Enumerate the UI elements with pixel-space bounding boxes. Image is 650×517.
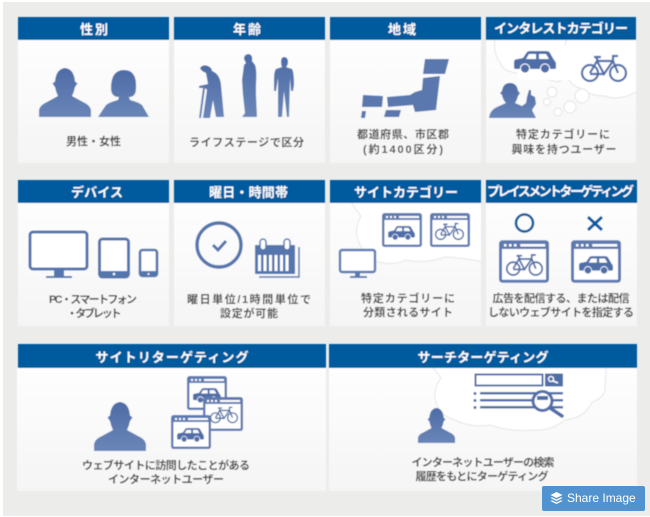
text: インターネットユーザー: インターネットユーザー (108, 473, 224, 486)
icon: person thinking (489, 83, 536, 118)
header: サーチターゲティング (329, 344, 637, 368)
header: 地域: 地域 (388, 22, 416, 37)
header: 年齢: 年齢 (233, 22, 261, 37)
text: 約1400区分: (約1400区分) (363, 142, 443, 156)
icon: monitor (340, 250, 375, 278)
panel: インタレストカテゴリー (486, 17, 640, 163)
share image button: Share Image (567, 491, 636, 505)
header: デバイス (18, 180, 169, 203)
header: インタレストカテゴリー (486, 17, 636, 40)
text: しないウェブサイトを指定する: しないウェブサイトを指定する (488, 305, 634, 319)
icon: smartphone (140, 250, 157, 277)
icon: calendar (255, 239, 299, 277)
text: インターネットユーザーの検索: インターネットユーザーの検索 (412, 455, 554, 469)
panel: サイトリターゲティング (17, 344, 326, 491)
panel: 地域 (330, 17, 481, 163)
text: ウェブサイトに訪問したことがある: ウェブサイトに訪問したことがある (82, 458, 250, 472)
icon: tablet (99, 239, 129, 278)
header: プレイスメントターゲティング (486, 180, 637, 203)
header: デバイス: デバイス (71, 185, 123, 200)
text: 広告を配信する、または配信: 広告を配信する、または配信 (492, 291, 630, 305)
panel: 性別 (18, 17, 169, 163)
icon: elderly figure with cane (199, 65, 224, 118)
panel: 曜日・時間帯 (174, 180, 325, 326)
icon: desktop monitor (30, 232, 87, 278)
icon: clock with check (197, 223, 241, 267)
header: 曜日・時間帯 (174, 180, 325, 203)
header: 性別: 性別 (80, 22, 108, 37)
icon: circle mark (516, 214, 533, 232)
icon: female silhouette (98, 70, 149, 117)
icon: stacked browser windows (172, 377, 242, 448)
icon: male silhouette (39, 68, 91, 117)
panel: サイトカテゴリー (330, 180, 485, 326)
icon: male silhouette (94, 402, 146, 451)
header: プレイスメントターゲティング: プレイスメントターゲティング (487, 184, 634, 199)
icon: search box and results (474, 374, 563, 416)
icon: browser with car (572, 242, 620, 281)
thought bubble (495, 36, 640, 116)
text: 設定が可能: 設定が可能 (220, 306, 278, 320)
icon: young figure standing (274, 57, 294, 117)
panel: 年齢 (174, 17, 325, 163)
text: 特定カテゴリーに: 特定カテゴリーに (361, 291, 455, 305)
header: インタレストカテゴリー: インタレストカテゴリー (494, 21, 628, 36)
header: サーチターゲティング: サーチターゲティング (418, 350, 548, 365)
icon: cross mark (588, 217, 602, 230)
header: 地域 (330, 17, 481, 40)
panel: デバイス (18, 180, 169, 326)
text: PC・スマートフォン: PC・スマートフォン (49, 294, 137, 306)
panel: プレイスメントターゲティング (486, 180, 637, 326)
text: ライフステージで区分: ライフステージで区分 (189, 135, 304, 149)
icon: browser with bicycle (500, 242, 548, 281)
header: サイトリターゲティング (18, 344, 326, 368)
share image button (542, 486, 645, 511)
icon: browser with car (383, 214, 421, 246)
panel: サーチターゲティング (329, 344, 637, 491)
header: サイトカテゴリー: サイトカテゴリー (354, 185, 458, 200)
text: 履歴をもとにターゲティング: 履歴をもとにターゲティング (416, 469, 548, 483)
icon: adult figure in profile (242, 54, 257, 117)
icon: bicycle (582, 56, 626, 81)
text: 男性・女性: 男性・女性 (66, 134, 121, 148)
text: 都道府県、市区郡: 都道府県、市区郡 (357, 127, 449, 141)
thought bubble (430, 364, 606, 430)
thought bubble (350, 200, 485, 264)
text: 分類されるサイト: 分類されるサイト (363, 305, 453, 319)
icon: car (514, 51, 556, 73)
header: サイトカテゴリー (330, 180, 481, 203)
header: サイトリターゲティング: サイトリターゲティング (96, 350, 248, 365)
header: 性別 (18, 17, 169, 40)
icon: user silhouette (418, 408, 455, 443)
text: 曜日単位/1時間単位で: 曜日単位/1時間単位で (187, 292, 311, 306)
icon: browser with bicycle (431, 214, 469, 246)
text: 特定カテゴリーに: 特定カテゴリーに (516, 127, 610, 141)
text: 興味を持つユーザー: 興味を持つユーザー (512, 142, 616, 156)
header: 年齢 (174, 17, 325, 40)
icon: map of Japan (361, 59, 449, 118)
text: ・タブレット: ・タブレット (66, 306, 122, 320)
header: 曜日・時間帯: 曜日・時間帯 (209, 185, 288, 200)
